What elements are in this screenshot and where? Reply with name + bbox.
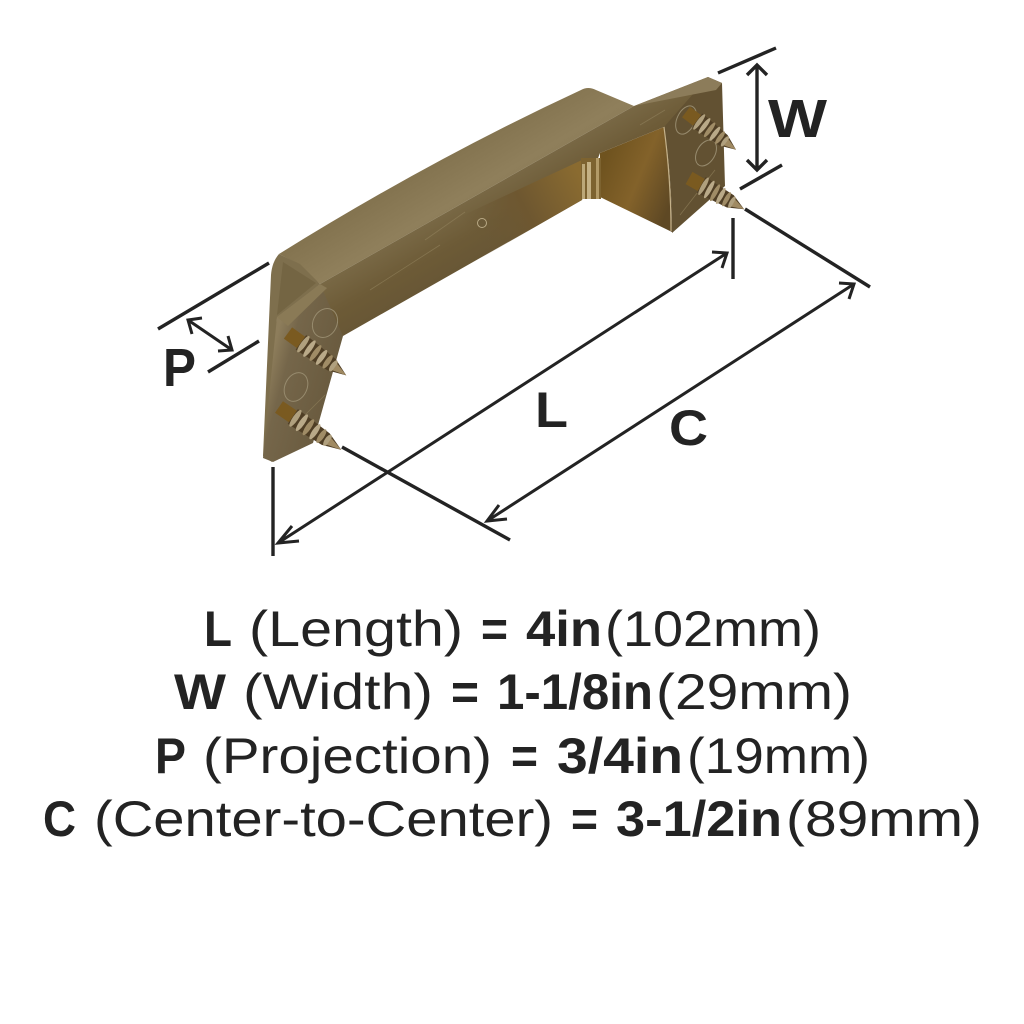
center ribs — [581, 158, 601, 199]
label: C: C — [669, 400, 708, 456]
spec line: center-to-center: = — [571, 791, 598, 847]
spec line: width — [174, 664, 852, 720]
P extension lines — [158, 263, 269, 372]
arrow: L — [278, 252, 727, 543]
spec line: center-to-center — [43, 791, 982, 847]
screw: right upper — [680, 104, 742, 157]
dimension lines — [158, 48, 870, 556]
spec line: projection: 3/4in — [557, 728, 683, 784]
right plate top edge — [634, 77, 722, 106]
spec line: length: (Length) — [249, 601, 463, 657]
screw: left upper — [282, 325, 352, 383]
screw: left lower — [273, 399, 347, 458]
screw hole outlines — [280, 103, 721, 405]
left flange — [263, 254, 320, 462]
label: P: P — [163, 338, 196, 398]
inner right bracket wall — [600, 127, 672, 232]
spec line: projection: (19mm) — [687, 728, 870, 784]
spec line: length: (102mm) — [605, 601, 821, 657]
brushed scratches — [300, 110, 715, 420]
spec line: center-to-center: C — [43, 791, 76, 847]
spec line: length: = — [481, 601, 508, 657]
spec line: center-to-center: (Center-to-Center) — [94, 791, 553, 847]
screw: right lower — [684, 169, 749, 218]
left plate bevel — [277, 284, 327, 326]
label: L: L — [535, 382, 568, 438]
spec line: projection: (Projection) — [203, 728, 492, 784]
spec line: projection: P — [155, 728, 186, 784]
spec line: width: W — [174, 664, 227, 720]
small maker mark — [478, 218, 486, 228]
arrow: W — [747, 65, 767, 170]
right bracket plate — [664, 77, 725, 233]
spec line: width: (29mm) — [656, 664, 852, 720]
cabinet pull product photo — [263, 77, 749, 462]
spec line: projection — [155, 728, 870, 784]
arrow: P — [188, 318, 232, 351]
top surface — [279, 88, 634, 284]
left recess — [277, 262, 316, 315]
left bracket plate — [263, 284, 343, 462]
spec line: width: (Width) — [243, 664, 433, 720]
L extension line left — [271, 467, 275, 556]
front strip — [277, 77, 716, 336]
arrow: C — [487, 283, 854, 521]
W extension lines — [718, 48, 782, 189]
spec line: center-to-center: 3-1/2in — [616, 791, 782, 847]
right plate highlight line — [664, 127, 671, 231]
spec line: width: 1-1/8in — [497, 664, 653, 720]
spec line: width: = — [451, 664, 479, 720]
L extension line right — [731, 218, 735, 279]
label: W: W — [768, 89, 827, 149]
spec line: center-to-center: (89mm) — [786, 791, 982, 847]
channel behind the handle — [440, 160, 582, 262]
spec line: projection: = — [511, 728, 538, 784]
spec line: length: L — [204, 601, 232, 657]
C extension lines — [342, 209, 870, 540]
spec line: length — [204, 601, 821, 657]
spec line: length: 4in — [526, 601, 602, 657]
